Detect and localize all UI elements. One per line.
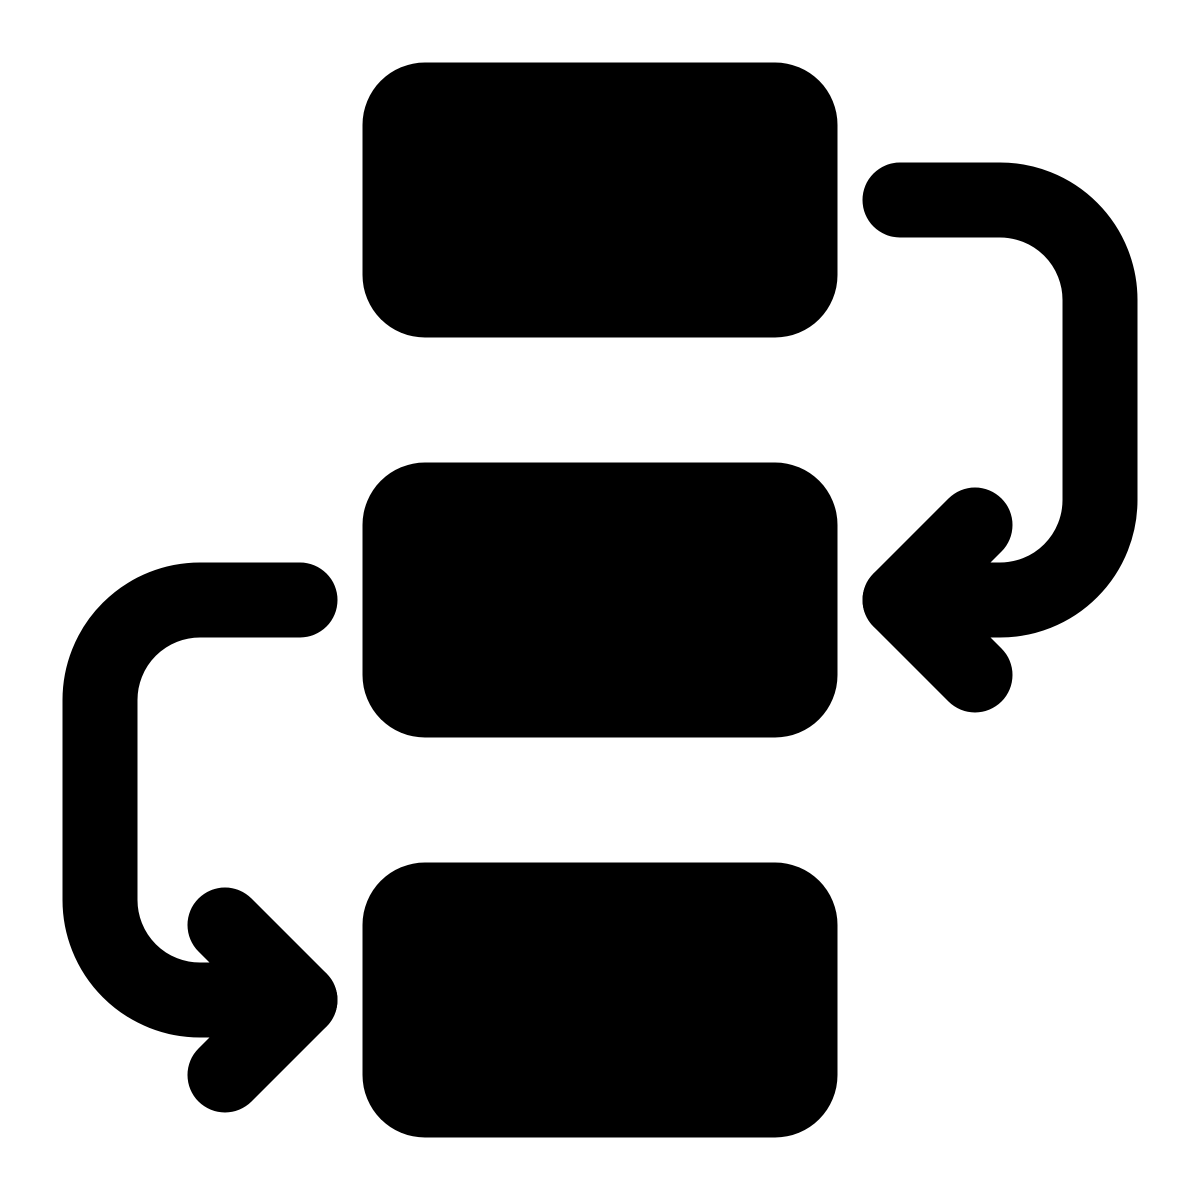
top process box [362,62,838,338]
middle process box [362,462,838,738]
bottom process box [362,862,838,1138]
arrow: top box to middle box [900,200,1100,675]
arrow: middle box to bottom box [100,600,300,1075]
